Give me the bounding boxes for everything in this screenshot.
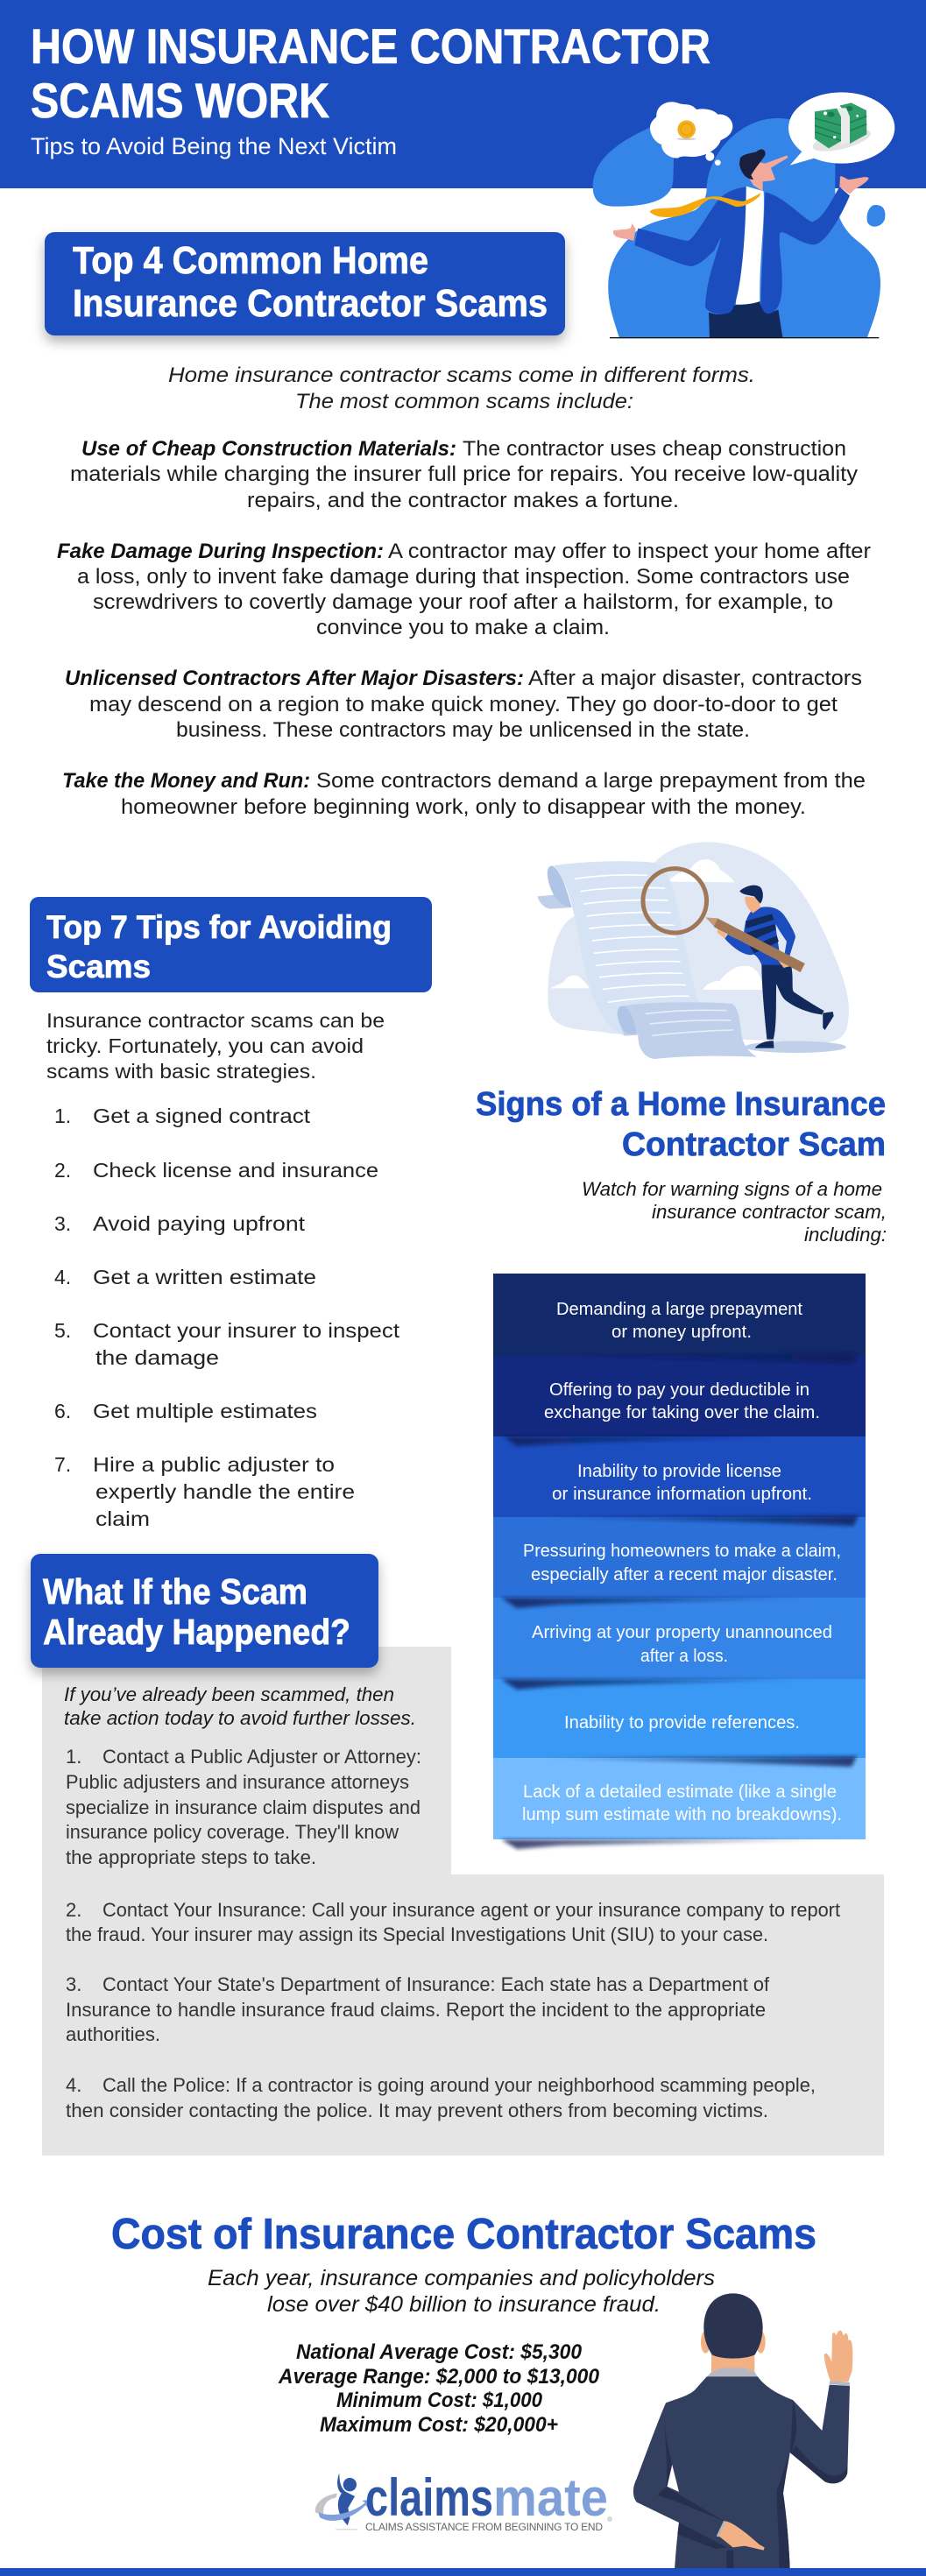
step 1: specialize in insurance claim disputes and <box>66 1796 421 1818</box>
tips list: Check license and insurance <box>93 1159 378 1182</box>
title: SCAMS WORK <box>31 73 329 128</box>
band 5 <box>493 1598 866 1679</box>
text block: take the money and run: Take the Money and Run: <box>62 769 310 793</box>
heading box: top 4 scams <box>45 232 565 335</box>
illustration: man from behind with raised hand and crossed fingers <box>633 2293 852 2569</box>
step 1: the appropriate steps to take. <box>66 1846 316 1868</box>
tips intro: Insurance contractor scams can be <box>46 1009 385 1032</box>
band 7 <box>493 1756 866 1839</box>
tips intro: scams with basic strategies. <box>46 1060 316 1083</box>
band 2 <box>493 1354 866 1436</box>
subtitle: Tips to Avoid Being the Next Victim <box>31 133 397 159</box>
band 3 <box>493 1436 866 1517</box>
cost intro: lose over $40 billion to insurance fraud. <box>267 2292 661 2317</box>
tips list: Avoid paying upfront <box>93 1212 306 1235</box>
signs intro text <box>582 1178 887 1246</box>
logo: claimsmate: CLAIMS ASSISTANCE FROM BEGINNING TO END <box>365 2521 603 2533</box>
text block: cheap materials: materials while charging the insurer full price for repairs. You receive low-quality <box>70 462 858 486</box>
text block: cheap materials: Use of Cheap Construction Materials: <box>81 437 456 461</box>
logo: claimsmate <box>315 2468 612 2533</box>
step 1: Public adjusters and insurance attorneys <box>66 1771 409 1793</box>
step 1: 1. <box>66 1746 81 1768</box>
band 7: Lack of a detailed estimate (like a single <box>523 1782 837 1802</box>
step 4 <box>66 2074 816 2121</box>
step 1 <box>66 1746 421 1868</box>
text block: take the money and run: Some contractors demand a large prepayment from the <box>316 769 866 793</box>
tips intro: tricky. Fortunately, you can avoid <box>46 1034 364 1057</box>
heading box: what if: Already Happened? <box>43 1612 350 1652</box>
band 5: after a loss. <box>640 1647 728 1666</box>
band 1: Demanding a large prepayment <box>556 1300 802 1319</box>
tips list: 4. <box>54 1266 71 1288</box>
tips list: 2. <box>54 1159 71 1182</box>
title: HOW INSURANCE CONTRACTOR <box>31 18 710 74</box>
band 5: Arriving at your property unannounced <box>532 1623 832 1642</box>
band 4: especially after a recent major disaster. <box>531 1565 838 1584</box>
text block: fake damage: convince you to make a claim. <box>316 616 610 639</box>
panel intro text <box>64 1683 416 1729</box>
cost heading: Cost of Insurance Contractor Scams <box>111 2211 816 2258</box>
intro text: Home insurance contractor scams come in different forms. <box>168 363 755 387</box>
band 6 <box>493 1679 866 1758</box>
footer bar <box>0 2568 926 2576</box>
signs heading <box>476 1086 886 1163</box>
tips list: Hire a public adjuster to <box>93 1453 335 1476</box>
step 1: insurance policy coverage. They'll know <box>66 1821 399 1843</box>
text block: fake damage: Fake Damage During Inspection: <box>57 540 384 563</box>
heading box: top 7 tips: Top 7 Tips for Avoiding <box>46 909 392 945</box>
intro text <box>168 363 755 413</box>
text block: cheap materials <box>70 437 858 512</box>
intro text: The most common scams include: <box>295 390 633 413</box>
logo: claimsmate: mate <box>493 2468 608 2527</box>
tips list <box>54 1105 400 1530</box>
icon: speech bubble with money stack <box>788 92 894 166</box>
man figure <box>717 886 834 1048</box>
tips list: expertly handle the entire <box>95 1480 355 1503</box>
warning signs stacked bands <box>493 1274 866 1849</box>
title <box>31 18 710 128</box>
step 2: Contact Your Insurance: Call your insurance agent or your insurance company to report <box>102 1899 840 1921</box>
grey panel: what if the scam already happened <box>42 1647 884 2156</box>
heading box: top 4 scams: Top 4 Common Home <box>73 239 428 282</box>
step 2: 2. <box>66 1899 81 1921</box>
band 2: Offering to pay your deductible in <box>549 1380 809 1400</box>
text block: cheap materials: The contractor uses cheap construction <box>463 437 846 461</box>
cost intro <box>208 2266 715 2317</box>
tips list: Get a written estimate <box>93 1266 316 1288</box>
step 3: Insurance to handle insurance fraud claims. Report the incident to the appropriate <box>66 1999 766 2021</box>
text block: cheap materials: repairs, and the contractor makes a fortune. <box>247 489 679 512</box>
step 3: 3. <box>66 1973 81 1995</box>
step 2 <box>66 1899 840 1945</box>
step 3 <box>66 1973 770 2045</box>
step 1: Contact a Public Adjuster or Attorney: <box>102 1746 421 1768</box>
band 4 <box>493 1515 866 1598</box>
text block: unlicensed contractors: After a major disaster, contractors <box>528 667 862 690</box>
icon: logo figure with swoosh <box>315 2473 371 2530</box>
cost intro: Each year, insurance companies and policyholders <box>208 2266 715 2290</box>
cost figures: Minimum Cost: $1,000 <box>336 2389 543 2412</box>
step 2: the fraud. Your insurer may assign its Special Investigations Unit (SIU) to your case. <box>66 1923 768 1945</box>
text block: take the money and run <box>62 769 866 819</box>
tips list: 1. <box>54 1105 71 1127</box>
tips list: 3. <box>54 1212 71 1235</box>
text block: fake damage: a loss, only to invent fake damage during that inspection. Some contractors use <box>77 565 850 589</box>
tips list: claim <box>95 1507 150 1530</box>
panel intro text: take action today to avoid further losses. <box>64 1707 416 1729</box>
illustration: man with long nose, thought cloud and money speech bubble <box>593 92 894 338</box>
header banner <box>0 0 926 188</box>
band 3: or insurance information upfront. <box>552 1485 812 1504</box>
heading box: top 4 scams: Insurance Contractor Scams <box>73 282 548 325</box>
signs intro text: including: <box>804 1224 887 1246</box>
text block: unlicensed contractors: business. These contractors may be unlicensed in the state. <box>176 718 750 742</box>
tips list: Get a signed contract <box>93 1105 311 1127</box>
signs heading: Signs of a Home Insurance <box>476 1086 886 1123</box>
tips list: 7. <box>54 1453 71 1476</box>
tips list: Contact your insurer to inspect <box>93 1319 400 1342</box>
text block: unlicensed contractors <box>65 667 862 742</box>
signs intro text: insurance contractor scam, <box>652 1201 887 1223</box>
band 1 <box>493 1274 866 1356</box>
tips list: the damage <box>95 1346 219 1369</box>
icon: magnifying glass <box>643 869 805 972</box>
step 4: Call the Police: If a contractor is going around your neighborhood scamming people, <box>102 2074 816 2096</box>
illustration: man with magnifying glass over long document <box>537 842 849 1059</box>
step 3: Contact Your State's Department of Insurance: Each state has a Department of <box>102 1973 770 1995</box>
step 3: authorities. <box>66 2023 160 2045</box>
band 2: exchange for taking over the claim. <box>544 1403 820 1422</box>
text block: unlicensed contractors: may descend on a region to make quick money. They go door-to-door to get <box>89 693 838 716</box>
text block: fake damage: A contractor may offer to inspect your home after <box>388 540 871 563</box>
heading box: what if: What If the Scam <box>43 1571 307 1612</box>
band 7: lump sum estimate with no breakdowns). <box>522 1805 842 1824</box>
text block: fake damage <box>57 540 871 639</box>
tips intro <box>46 1009 385 1083</box>
band 1: or money upfront. <box>611 1323 752 1342</box>
panel intro text: If you’ve already been scammed, then <box>64 1683 394 1705</box>
tips list: 5. <box>54 1319 71 1342</box>
cost figures: Average Range: $2,000 to $13,000 <box>278 2365 600 2389</box>
text block: fake damage: screwdrivers to covertly damage your roof after a hailstorm, for example, to <box>93 590 833 614</box>
icon: thought cloud with coin <box>650 102 732 166</box>
signs heading: Contractor Scam <box>622 1126 886 1163</box>
text block: take the money and run: homeowner before beginning work, only to disappear with the money. <box>121 795 806 819</box>
cost figures <box>278 2340 600 2437</box>
band 3: Inability to provide license <box>577 1462 781 1481</box>
heading box: top 7 tips <box>30 897 432 992</box>
cost figures: Maximum Cost: $20,000+ <box>320 2413 558 2437</box>
heading box: what if <box>31 1554 378 1668</box>
band 4: Pressuring homeowners to make a claim, <box>523 1542 841 1561</box>
step 4: then consider contacting the police. It may prevent others from becoming victims. <box>66 2100 768 2121</box>
cost figures: National Average Cost: $5,300 <box>296 2340 583 2364</box>
logo: claimsmate: claims <box>365 2468 493 2527</box>
heading box: top 7 tips: Scams <box>46 949 151 985</box>
tips list: Get multiple estimates <box>93 1400 317 1422</box>
man figure <box>613 149 869 337</box>
text block: unlicensed contractors: Unlicensed Contractors After Major Disasters: <box>65 667 524 690</box>
tips list: 6. <box>54 1400 71 1422</box>
signs intro text: Watch for warning signs of a home <box>582 1178 882 1200</box>
band 6: Inability to provide references. <box>564 1713 800 1733</box>
step 4: 4. <box>66 2074 81 2096</box>
